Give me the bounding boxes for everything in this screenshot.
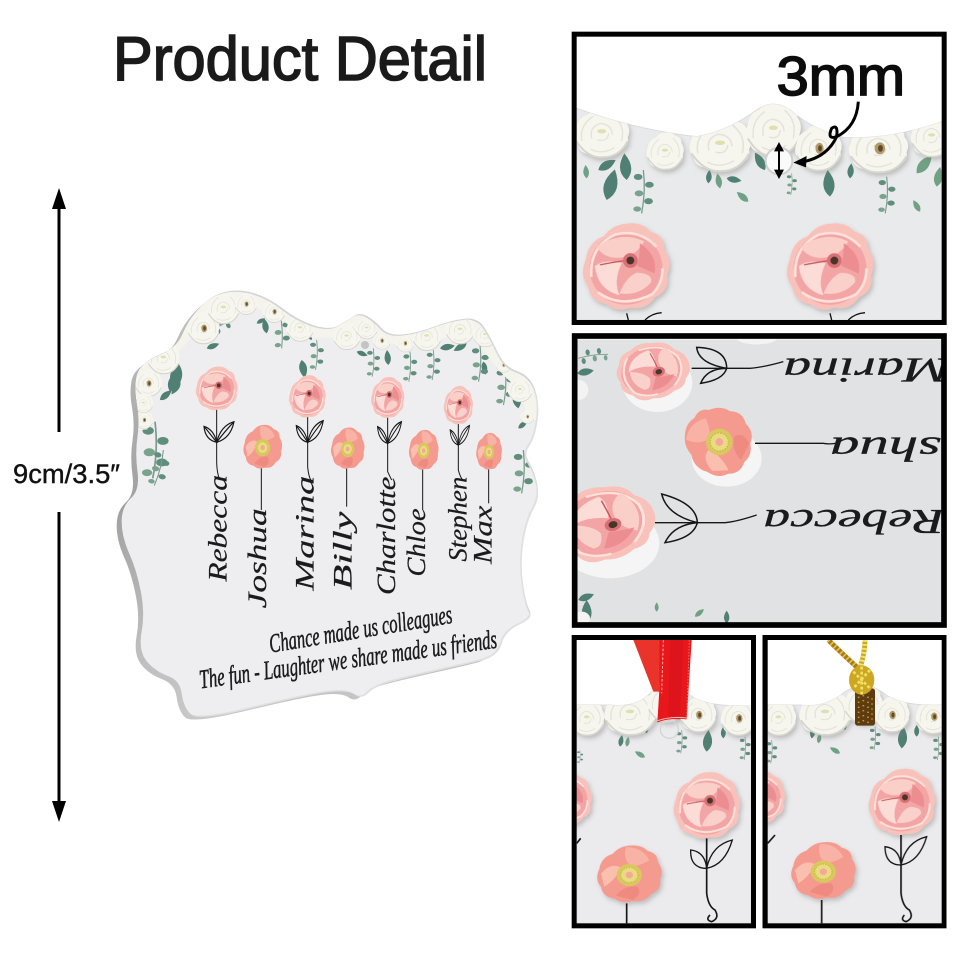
names in script: Charlotte: [371, 476, 401, 595]
names in script: Joshua: [242, 508, 272, 608]
stems: [768, 835, 927, 923]
title: Product Detail: [113, 25, 487, 94]
upside-down names: Marina: [783, 350, 952, 389]
names in script: Marina: [289, 476, 319, 592]
gold cord: [828, 640, 875, 726]
names in script: [203, 475, 498, 608]
upside-down names: Rebecca: [763, 502, 947, 541]
poppy flowers: [243, 425, 502, 470]
height dimension arrow: [52, 188, 66, 822]
quote text: [197, 599, 499, 694]
panel: main acrylic plaque: [117, 291, 538, 720]
panel: ribbon option: [539, 637, 756, 926]
curved arrow: [793, 102, 858, 167]
flower stems: [204, 408, 489, 510]
garland: [768, 725, 942, 764]
panel: names close-up: [548, 332, 960, 625]
corner foliage: [568, 332, 777, 625]
white halos: [578, 372, 762, 578]
plaque top edge: [577, 688, 751, 923]
floral garland: [134, 292, 535, 493]
panel: gold cord option: [732, 637, 951, 926]
plaque top edge: [577, 104, 942, 320]
rose flowers: [196, 366, 473, 424]
garland leaves: [583, 151, 944, 213]
names in script: Rebecca: [203, 475, 233, 583]
panel: thickness detail: [574, 34, 953, 322]
height label: 9cm/3.5″: [13, 459, 120, 489]
names in script: Billy: [328, 511, 358, 590]
names in script: Max: [468, 505, 498, 565]
ring: [660, 720, 678, 738]
quote text: Chance made us colleagues: [267, 599, 454, 659]
red ribbon: [633, 640, 692, 722]
quote text: The fun - Laughter we share made us friends: [197, 624, 499, 694]
thickness label: 3mm: [777, 45, 905, 107]
flowers: [768, 768, 939, 904]
stems: [577, 838, 732, 923]
flowers: [548, 333, 757, 572]
plaque top edge: [768, 686, 942, 923]
double arrow: [774, 142, 784, 179]
ornament hole: [766, 148, 792, 174]
flowers: [576, 772, 744, 907]
stems: [655, 347, 840, 543]
upside-down names: [763, 350, 960, 541]
names in script: Chloe: [401, 508, 431, 577]
garland: [577, 727, 751, 764]
names in script: Stephen: [443, 477, 473, 562]
plaque edge: [117, 291, 538, 720]
white roses: [574, 101, 953, 172]
pink roses: [583, 223, 873, 310]
plaque face: [122, 292, 537, 716]
leaf tips: [627, 313, 865, 320]
